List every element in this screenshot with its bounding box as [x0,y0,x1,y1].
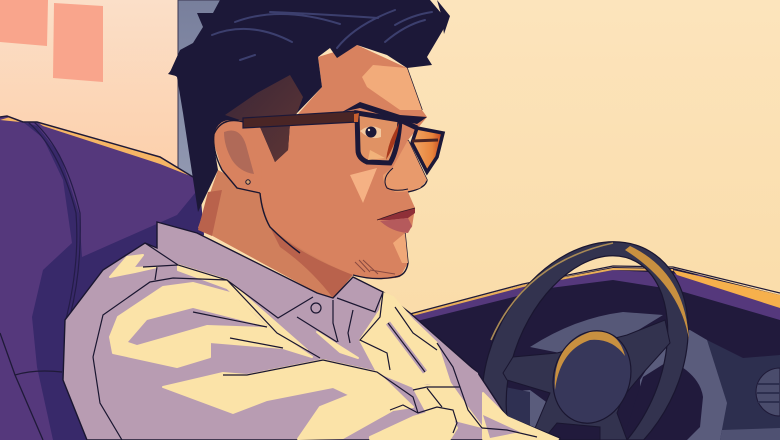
shirt [63,222,560,440]
shirt fold lines [93,243,537,440]
steering wheel [482,242,689,440]
hair [168,0,450,212]
brown undercut [225,75,303,162]
hair strands [212,10,432,60]
shirt highlights [110,255,558,439]
neck shadow [198,190,353,298]
neck [198,170,353,298]
gold detail behind hair [220,0,238,10]
dashboard [410,266,780,440]
forehead highlight [362,65,422,110]
panel: peach left wall [0,0,178,175]
lips [377,208,415,233]
shirt button [311,303,321,313]
car seat [0,116,204,440]
chin highlight [393,233,408,263]
sticky notes [0,0,103,82]
stubble [355,260,395,274]
jaw and face outline [260,68,427,279]
eyebrow [342,102,427,124]
face [213,45,427,279]
nose [383,140,427,192]
cheek highlight [350,168,377,203]
ear [213,120,262,193]
shirt shadow folds [128,308,267,345]
hair tufts [168,0,450,76]
blue-grey window pillar [178,0,224,190]
nose outline [385,168,408,190]
glasses [243,111,443,172]
eye [360,126,381,138]
